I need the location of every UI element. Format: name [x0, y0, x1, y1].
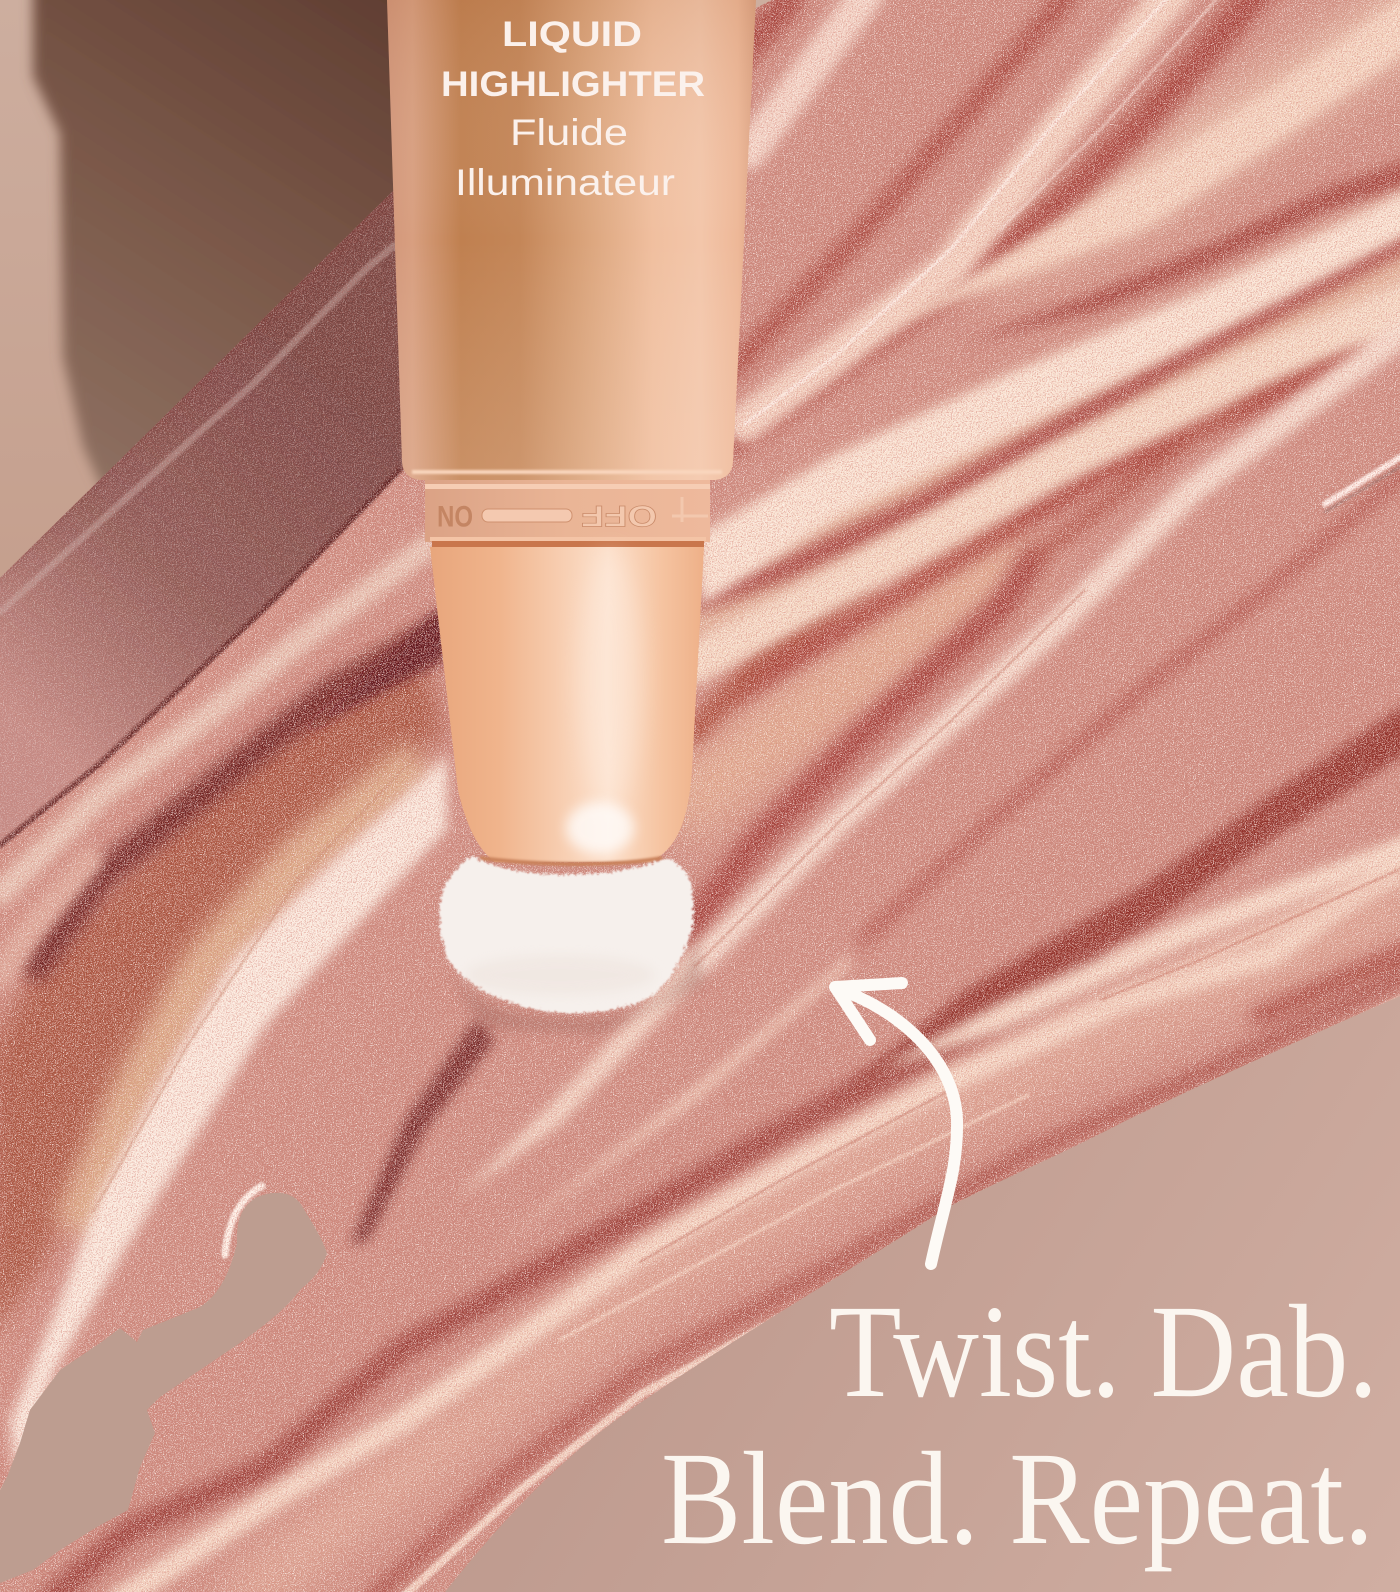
- dark tapered creases: [300, 155, 1400, 1245]
- background: beige surface bottom right: [400, 960, 1400, 1592]
- label line: Illuminateur: Illuminateur: [455, 162, 675, 203]
- scraped gap in swatch bottom left: [0, 1193, 327, 1583]
- label line: Fluide: Fluide: [510, 112, 628, 153]
- tube body: [387, 0, 756, 480]
- neck lower glow: [566, 802, 634, 854]
- crease: upper right: [960, 155, 1400, 345]
- gold halo beside highlight wedge: [75, 760, 420, 1230]
- neck highlight: [578, 550, 642, 810]
- crease: corner by neck: [300, 605, 445, 735]
- collar tick mark: [672, 497, 708, 522]
- cream: upper right broad: [880, 0, 1400, 330]
- rust field left: [0, 637, 445, 1340]
- cream: main peach band: [700, 185, 1400, 607]
- background: beige surface top left: [0, 0, 1400, 640]
- puff soft shade: [465, 955, 655, 995]
- cream: below puff two: [490, 955, 850, 1250]
- collar text OFF: OFF: [581, 499, 657, 532]
- puff shadow: [445, 935, 705, 1034]
- collar band: [425, 480, 710, 542]
- cast shadow of tube on surface: [33, 0, 420, 495]
- label line: HIGHLIGHTER: HIGHLIGHTER: [441, 65, 705, 104]
- cream: below puff one: [455, 950, 694, 1200]
- cream: lower right two: [1000, 858, 1400, 1050]
- cream: lower right one: [880, 830, 1400, 1070]
- groove under collar: [432, 541, 704, 547]
- heading: Twist. Dab. Blend. Repeat.: [661, 1277, 1378, 1572]
- collar groove: [482, 509, 572, 522]
- mauve upper left field: [0, 192, 404, 756]
- arrow head: [835, 983, 902, 1040]
- puff body: [439, 856, 694, 1013]
- mauve field overlay to calm glitter: [0, 170, 440, 860]
- twist collar: [425, 480, 710, 547]
- cream: large highlight wedge: [10, 755, 447, 1475]
- collar text ON: ON: [437, 499, 473, 532]
- tube body lower sheen: [412, 470, 722, 474]
- tube label: [441, 15, 705, 203]
- collar top ridge: [425, 484, 710, 489]
- puff applicator: [439, 856, 705, 1034]
- crease: below puff: [350, 1020, 495, 1245]
- arrow pointing to swatch: [835, 983, 957, 1264]
- crease: large lower right: [830, 695, 1400, 1100]
- tube body vertical tone: [387, 0, 756, 480]
- arrow shaft: [836, 988, 957, 1264]
- product tube: [387, 0, 756, 864]
- collar bottom ridge: [430, 537, 706, 541]
- applicator neck: [430, 547, 704, 862]
- neck rust rim: [480, 858, 662, 864]
- label line: LIQUID: LIQUID: [502, 15, 642, 54]
